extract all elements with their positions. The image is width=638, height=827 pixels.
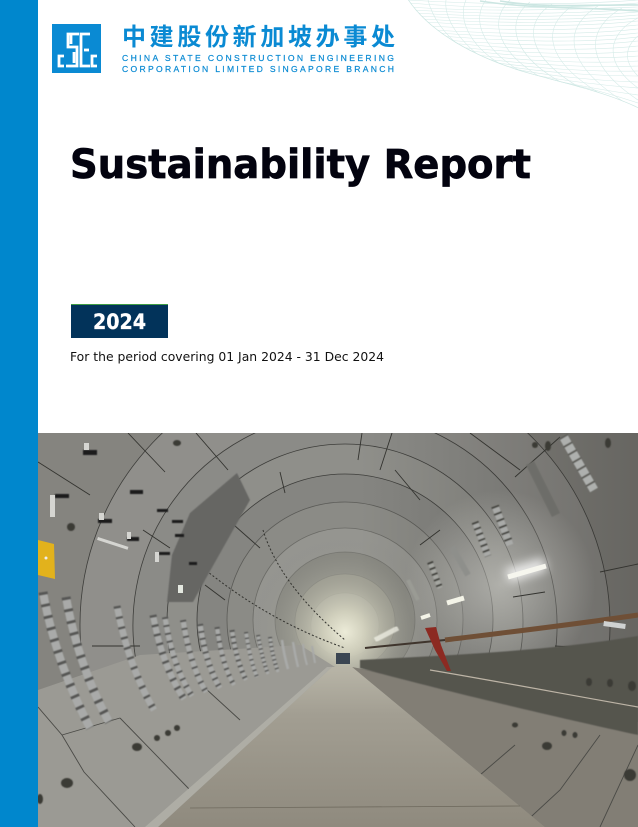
dark wall band (360, 636, 638, 735)
wall lights (375, 564, 546, 640)
upper right cable ladders (408, 436, 594, 600)
blue sidebar (0, 0, 38, 827)
tunnel floor (158, 667, 545, 827)
title: Sustainability Report (70, 142, 531, 188)
yellow box (38, 540, 55, 579)
decorative wave mesh (408, 0, 638, 108)
Chinese company name: 中建股份新加坡办事处 (122, 17, 395, 52)
right side shading (423, 433, 638, 722)
English company name line one: CHINA STATE CONSTRUCTION ENGINEERING (122, 53, 394, 63)
year badge: 2024 (93, 310, 146, 334)
lower left wall (38, 645, 335, 827)
company logo (52, 17, 395, 74)
red hose reel (425, 627, 451, 671)
lower wall seams (38, 688, 638, 827)
year badge (71, 304, 168, 338)
tunnel lining rings (80, 433, 610, 815)
distant train (336, 653, 350, 664)
tunnel photo illustration (38, 433, 638, 827)
left cable brackets (43, 592, 315, 728)
reporting period: For the period covering 01 Jan 2024 - 31 Dec 2024 (70, 350, 384, 364)
segment joints (38, 433, 638, 649)
brown pipe (445, 615, 638, 640)
logo mark: CSCEC (52, 24, 101, 73)
right wall light wash (420, 502, 581, 654)
bolts on left wall (55, 450, 197, 565)
lower right wall (352, 667, 638, 827)
English company name line two: CORPORATION LIMITED SINGAPORE BRANCH (122, 64, 394, 74)
dark ceiling panel (167, 473, 250, 602)
central light glow (274, 552, 416, 670)
wall recesses (37, 438, 636, 804)
cable along wall (430, 670, 638, 707)
